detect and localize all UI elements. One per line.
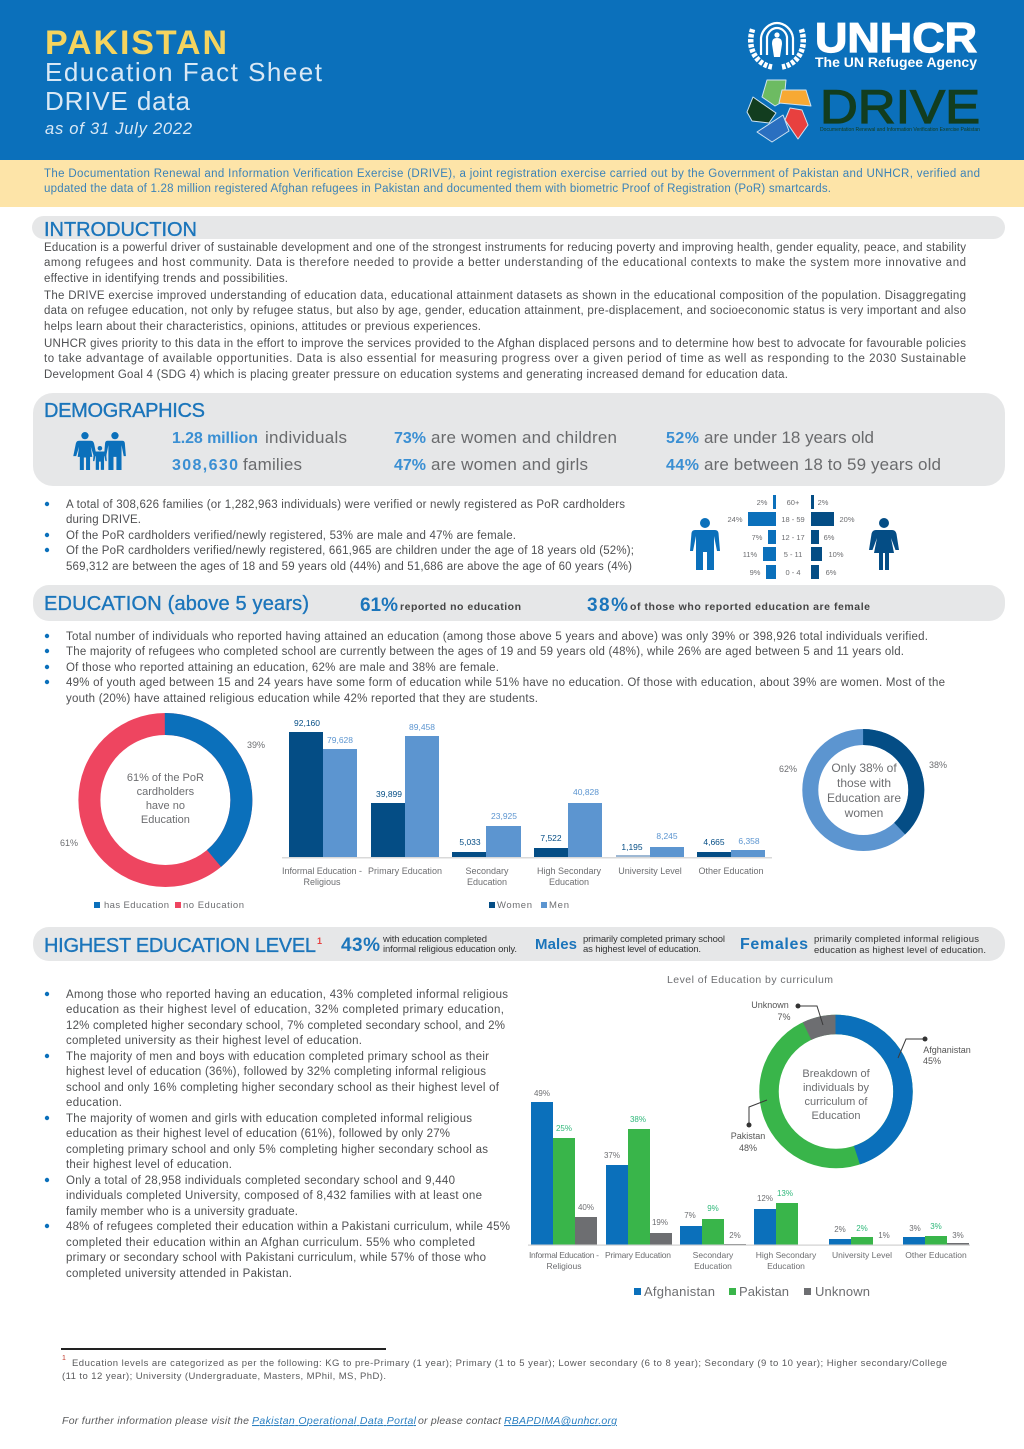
heading: highest education level: 1	[317, 936, 322, 946]
title: PAKISTAN	[45, 24, 227, 62]
chart: level of education by curriculum: 40%	[578, 1203, 594, 1212]
further information line: RBAPDIMA@unhcr.org	[504, 1415, 617, 1427]
stat: females	[740, 934, 986, 956]
text block: education bullets: The majority of refugees who completed school are currently between the ages of 19 and 59 years old (48%), while 26% are aged between 5 and 11 years old.	[66, 646, 904, 658]
footnote: Education levels are categorized as per the following: KG to pre-Primary (1 year); Primary (1 to 5 year); Lower secondary (6 to 8 year); Secondary (9 to 10 year); Higher secondary/College	[72, 1358, 947, 1369]
chart: education by sex: 4,665	[703, 837, 725, 847]
legend	[634, 1284, 870, 1299]
chart: age and sex pyramid: 5 - 11	[784, 550, 802, 559]
text block: education bullets: Total number of individuals who reported having attained an education (among those above 5 years and above) was only 39% or 398,926 total individuals verified.	[66, 631, 928, 643]
text block: highest education bullets: Only a total of 28,958 individuals completed secondary school and 9,440	[66, 1175, 455, 1187]
icon: man	[690, 518, 720, 570]
chart: age and sex pyramid: 2%	[757, 498, 768, 507]
stat: females: Females	[740, 936, 808, 953]
further information line: Pakistan Operational Data Portal	[252, 1415, 417, 1427]
chart: donut, women with education	[779, 737, 947, 843]
chart: education by sex: 7,522	[540, 833, 562, 843]
stats: women and children: 73%	[394, 430, 426, 447]
chart: age and sex pyramid: 18 - 59	[781, 515, 805, 524]
stat: no education	[360, 595, 521, 616]
chart: donut, women with education: Only 38% of	[831, 761, 897, 775]
chart: level of education by curriculum: 2%	[729, 1231, 741, 1240]
text block: demographics bullets: during DRIVE.	[66, 514, 141, 526]
text block: introduction: Development Goal 4 (SDG 4) which is placing greater pressure on education systems and generating increased demand for education data.	[44, 369, 788, 381]
legend: Pakistan	[739, 1284, 789, 1299]
chart: age and sex pyramid: 7%	[752, 533, 763, 542]
text block: introduction: helps learn about their characteristics, opinions, attitudes or previous experiences.	[44, 321, 481, 333]
heading: introduction: INTRODUCTION	[44, 219, 197, 241]
chart: age and sex pyramid: 6%	[826, 568, 837, 577]
chart: donut, education share	[60, 724, 265, 911]
stat: 43 percent: informal religious education only.	[383, 944, 517, 955]
legend	[94, 900, 244, 911]
chart: donut, education share: 61%	[60, 838, 78, 848]
footnote	[61, 1348, 947, 1382]
chart: education by sex: 92,160	[294, 718, 320, 728]
chart: age and sex pyramid: 20%	[839, 515, 855, 524]
chart: donut, women with education: women	[844, 806, 883, 820]
stat: female share	[587, 595, 870, 616]
text block: highest education bullets: family member who is a university graduate.	[66, 1206, 298, 1218]
chart: level of education by curriculum: 3%	[952, 1231, 964, 1240]
chart: education by sex: 1,195	[621, 842, 643, 852]
text block: highest education bullets: school and only 16% completing higher secondary school as their highest level of	[66, 1082, 500, 1094]
heading: introduction	[32, 216, 1005, 241]
chart: level of education by curriculum: Religious	[547, 1261, 581, 1271]
text block: highest education bullets: completed their education within an Afghan curriculum. 55% who completed	[66, 1237, 475, 1249]
text block: education bullets: Of those who reported attaining an education, 62% are male and 38% are female.	[66, 662, 499, 674]
chart: education by sex: University Level	[618, 866, 682, 876]
chart: level of education by curriculum: University Level	[832, 1250, 892, 1260]
chart: donut, education share: Education	[141, 814, 190, 826]
legend: has Education	[104, 900, 169, 911]
chart: donut, curriculum breakdown: curriculum of	[805, 1096, 868, 1108]
chart: education by sex	[282, 718, 772, 911]
chart: education by sex: 79,628	[327, 735, 353, 745]
stats: individuals and families: families	[243, 455, 302, 474]
text block: education bullets: youth (20%) have attained religious education while 42% reported that they are students.	[66, 693, 538, 705]
stats: individuals and families: 1.28 million	[172, 430, 258, 447]
stat: females: primarily completed informal religious	[814, 934, 979, 945]
legend	[489, 900, 569, 911]
text block: introduction: to take advantage of available opportunities. Data is also essential for measuring progress over a given period of time as well as responding to the 2030 Sustainable	[44, 353, 966, 365]
further information line: For further information please visit the	[62, 1415, 249, 1427]
callout: unknown: Unknown	[751, 1000, 789, 1010]
chart: age and sex pyramid: 24%	[727, 515, 743, 524]
stat: males: Males	[535, 936, 577, 953]
chart: age and sex pyramid: 10%	[828, 550, 844, 559]
chart: donut, curriculum breakdown: Breakdown of	[802, 1068, 871, 1080]
stats: women and children: are women and girls	[431, 455, 588, 474]
chart: education by sex: Education	[549, 877, 589, 887]
chart: donut, curriculum breakdown: Education	[812, 1110, 860, 1122]
chart: education by sex: 23,925	[491, 811, 517, 821]
stat: no education: reported no education	[400, 601, 521, 613]
chart: level of education by curriculum: 3%	[930, 1222, 942, 1231]
chart title: Level of Education by curriculum	[667, 974, 833, 986]
panel: education header	[33, 585, 1005, 621]
chart: level of education by curriculum: 9%	[707, 1204, 719, 1213]
text block: demographics bullets: 569,312 are between the ages of 18 and 59 years old (44%) and 51,686 are above the age of 60 years (4%)	[66, 561, 632, 573]
stats: individuals and families: 308,630	[172, 457, 238, 474]
title: as of 31 July 2022	[45, 120, 192, 138]
stats: individuals and families	[172, 428, 347, 474]
chart: education by sex: 40,828	[573, 787, 599, 797]
intro band: The Documentation Renewal and Information Verification Exercise (DRIVE), a joint registration exercise carried out by the Government of Pakistan and UNHCR, verified and	[44, 168, 980, 180]
text block: demographics bullets	[45, 499, 634, 573]
text block: education bullets: 49% of youth aged between 15 and 24 years have some form of education while 51% have no education. Of those with education, about 39% are women. Most of the	[66, 677, 945, 689]
chart: donut, curriculum breakdown: individuals by	[803, 1082, 870, 1094]
text block: education bullets	[45, 631, 945, 705]
text block: highest education bullets	[45, 989, 510, 1280]
chart: level of education by curriculum: 12%	[757, 1194, 773, 1203]
panel: highest education level header	[33, 927, 1005, 961]
chart: level of education by curriculum: Education	[767, 1261, 805, 1271]
chart: education by sex: Other Education	[698, 866, 764, 876]
text block: demographics bullets: A total of 308,626 families (or 1,282,963 individuals) were verified or newly registered as PoR cardholders	[66, 499, 625, 511]
legend: Women	[497, 900, 532, 911]
text block: highest education bullets: highest level of education (36%), followed by 32% completing informal religious	[66, 1066, 486, 1078]
chart: education by sex: 6,358	[738, 836, 760, 846]
callout: pakistan: 48%	[739, 1143, 757, 1153]
callout: unknown: 7%	[777, 1012, 791, 1022]
chart: level of education by curriculum: 2%	[834, 1225, 846, 1234]
legend: Afghanistan	[644, 1284, 715, 1299]
text block: highest education bullets: Among those who reported having an education, 43% completed informal religious	[66, 989, 508, 1001]
chart: level of education by curriculum: 2%	[856, 1224, 868, 1233]
text block: highest education bullets: primary or secondary school with Pakistani curriculum, while 57% of those who	[66, 1252, 486, 1264]
text block: highest education bullets: individuals completed University, composed of 8,432 families with at least one	[66, 1190, 482, 1202]
stat: 43 percent: with education completed	[382, 934, 487, 945]
chart: level of education by curriculum: High Secondary	[756, 1250, 817, 1260]
chart: level of education by curriculum: Other Education	[905, 1250, 967, 1260]
stat: 43 percent	[341, 934, 517, 956]
UNHCR logo text: UNHCR	[815, 14, 977, 61]
DRIVE logo text: DRIVE	[820, 80, 980, 133]
text block: demographics bullets: Of the PoR cardholders verified/newly registered, 53% are male and 47% are female.	[66, 530, 516, 542]
stat: females: education as highest level of education.	[814, 945, 986, 956]
text block: highest education bullets: completed university as their highest level of education.	[66, 1035, 362, 1047]
icon: family	[73, 432, 126, 470]
chart: level of education by curriculum: 19%	[652, 1218, 668, 1227]
stats: age groups: are between 18 to 59 years old	[704, 455, 941, 474]
stats: age groups: 44%	[666, 457, 699, 474]
chart: donut, women with education: those with	[837, 776, 891, 790]
further information line: or please contact	[418, 1415, 502, 1427]
footnote: (11 to 12 year); University (Undergraduate, Masters, MPhil, MS, PhD).	[62, 1371, 386, 1382]
callout: afghanistan	[898, 1036, 971, 1066]
chart: donut, education share: 61% of the PoR	[127, 772, 204, 784]
chart: donut, education share: 39%	[247, 740, 265, 750]
chart: age and sex pyramid: 0 - 4	[785, 568, 801, 577]
chart: level of education by curriculum: Education	[694, 1261, 732, 1271]
text block: highest education bullets: completing primary school and only 5% completing higher secondary school as	[66, 1144, 488, 1156]
chart: education by sex: 89,458	[409, 722, 435, 732]
chart: donut, women with education: Education are	[827, 791, 901, 805]
stats: women and children	[394, 428, 617, 474]
text block: demographics bullets: Of the PoR cardholders verified/newly registered, 661,965 are children under the age of 18 years old (52%);	[66, 545, 634, 557]
stat: female share: of those who reported education are female	[630, 601, 870, 613]
text block: highest education bullets: education as their highest level of education, 32% completed primary education,	[66, 1004, 504, 1016]
chart: donut, education share: cardholders	[137, 786, 195, 798]
text block: highest education bullets: completed university attended in Pakistan.	[66, 1268, 292, 1280]
chart: level of education by curriculum: 1%	[878, 1231, 890, 1240]
legend: Unknown	[815, 1284, 870, 1299]
text block: highest education bullets: The majority of men and boys with education completed primary school as their	[66, 1051, 489, 1063]
stats: age groups: are under 18 years old	[704, 428, 874, 447]
stats: women and children: are women and children	[431, 428, 617, 447]
chart: level of education by curriculum: 7%	[684, 1211, 696, 1220]
icon: DRIVE logo mark	[747, 80, 811, 142]
stats: age groups: 52%	[666, 430, 699, 447]
text block: introduction: Education is a powerful driver of sustainable development and one of the strongest instruments for reducing poverty and improving health, gender equality, peace, and stability	[44, 242, 966, 254]
chart: age and sex pyramid: 12 - 17	[781, 533, 805, 542]
text block: highest education bullets: The majority of women and girls with education completed informal religious	[66, 1113, 472, 1125]
UNHCR logo text: The UN Refugee Agency	[815, 54, 977, 70]
stats: individuals and families: individuals	[265, 428, 347, 447]
legend: no Education	[183, 900, 244, 911]
chart: donut, education share: have no	[146, 800, 185, 812]
callout: pakistan	[731, 1100, 767, 1153]
chart: level of education by curriculum: 37%	[604, 1151, 620, 1160]
chart: education by sex: Secondary	[465, 866, 509, 876]
text block: highest education bullets: their highest level of education.	[66, 1159, 232, 1171]
callout: afghanistan: 45%	[923, 1056, 941, 1066]
chart: level of education by curriculum: Informal Education -	[529, 1250, 599, 1260]
stats: women and children: 47%	[394, 457, 426, 474]
chart: level of education by curriculum: 13%	[777, 1189, 793, 1198]
chart: education by sex: Informal Education -	[282, 866, 362, 876]
chart: level of education by curriculum: 3%	[909, 1224, 921, 1233]
chart: education by sex: High Secondary	[537, 866, 602, 876]
stat: 43 percent: 43%	[341, 935, 380, 956]
text block: introduction: UNHCR gives priority to this data in the effort to improve the services provided to the Afghan displaced persons and to determine how best to advocate for favourable policies	[44, 338, 966, 350]
stat: males: as highest level of education.	[583, 944, 701, 955]
stats: age groups	[666, 428, 941, 474]
stat: males: primarily completed primary school	[583, 934, 725, 945]
chart: level of education by curriculum: Secondary	[693, 1250, 734, 1260]
legend: Men	[549, 900, 569, 911]
title: Education Fact Sheet	[45, 57, 323, 87]
callout: unknown	[751, 1000, 823, 1025]
text block: introduction: data on refugee education, not only by refugee status, but also by age, gender, education attainment, pre-displacement, and socioeconomic status is very important and also	[44, 305, 966, 317]
panel: demographics	[33, 393, 1005, 486]
text block: introduction: The DRIVE exercise improved understanding of education data, educational attainment datasets as shown in the educational composition of the population. Disaggregating	[44, 290, 966, 302]
title	[45, 24, 323, 138]
chart: level of education by curriculum: 49%	[534, 1089, 550, 1098]
chart: level of education by curriculum: 38%	[630, 1115, 646, 1124]
chart: level of education by curriculum: Primary Education	[605, 1250, 671, 1260]
chart: age and sex pyramid: 11%	[743, 550, 758, 559]
heading: highest education level: HIGHEST EDUCATION LEVEL	[44, 935, 316, 957]
text block: introduction	[44, 242, 966, 381]
callout: afghanistan: Afghanistan	[923, 1045, 971, 1055]
chart: donut, women with education: 62%	[779, 764, 797, 774]
stat: female share: 38%	[587, 595, 628, 616]
heading: demographics: DEMOGRAPHICS	[44, 400, 205, 422]
callout: pakistan: Pakistan	[731, 1131, 765, 1141]
icon: woman	[869, 518, 899, 570]
text block: introduction: among refugees and host community. Data is therefore needed to provide a better understanding of the educational contexts to make the system more innovative and	[44, 257, 966, 269]
intro band: updated the data of 1.28 million registered Afghan refugees in Pakistan and documented them with biometric Proof of Registration (PoR) smartcards.	[44, 183, 831, 195]
panel: education header: EDUCATION (above 5 years)	[44, 593, 309, 615]
chart: education by sex: 39,899	[376, 789, 402, 799]
text block: highest education bullets: 12% completed higher secondary school, 7% completed secondary school, and 2%	[66, 1020, 505, 1032]
chart: education by sex: Religious	[303, 877, 341, 887]
chart: education by sex: Primary Education	[368, 866, 442, 876]
chart: age and sex pyramid	[727, 495, 855, 579]
chart: age and sex pyramid: 9%	[750, 568, 761, 577]
header banner	[0, 0, 1024, 160]
text block: highest education bullets: education as their highest level of education (61%), followed by only 27%	[66, 1128, 450, 1140]
chart: level of education by curriculum	[528, 1089, 970, 1299]
chart: age and sex pyramid: 60+	[787, 498, 800, 507]
text block: highest education bullets: education.	[66, 1097, 122, 1109]
chart: donut, curriculum breakdown	[731, 1000, 971, 1158]
stat: males	[535, 934, 725, 955]
chart: age and sex pyramid: 2%	[818, 498, 829, 507]
further information line	[62, 1415, 617, 1427]
chart: education by sex: 5,033	[459, 837, 481, 847]
title: DRIVE data	[45, 86, 191, 116]
text block: highest education bullets: 48% of refugees completed their education within a Pakistani curriculum, while 45%	[66, 1221, 510, 1233]
footnote: 1	[62, 1355, 66, 1362]
chart: donut, women with education: 38%	[929, 760, 947, 770]
intro band	[0, 160, 1024, 207]
icon: UNHCR emblem	[751, 23, 803, 67]
chart: education by sex: Education	[467, 877, 507, 887]
text block: introduction: effective in identifying trends and possibilities.	[44, 273, 288, 285]
chart: education by sex: 8,245	[656, 831, 678, 841]
chart: level of education by curriculum: 25%	[556, 1124, 572, 1133]
stat: no education: 61%	[360, 595, 398, 616]
chart: age and sex pyramid: 6%	[824, 533, 835, 542]
DRIVE logo text: Documentation Renewal and Information Verification Exercise Pakistan	[820, 127, 980, 133]
